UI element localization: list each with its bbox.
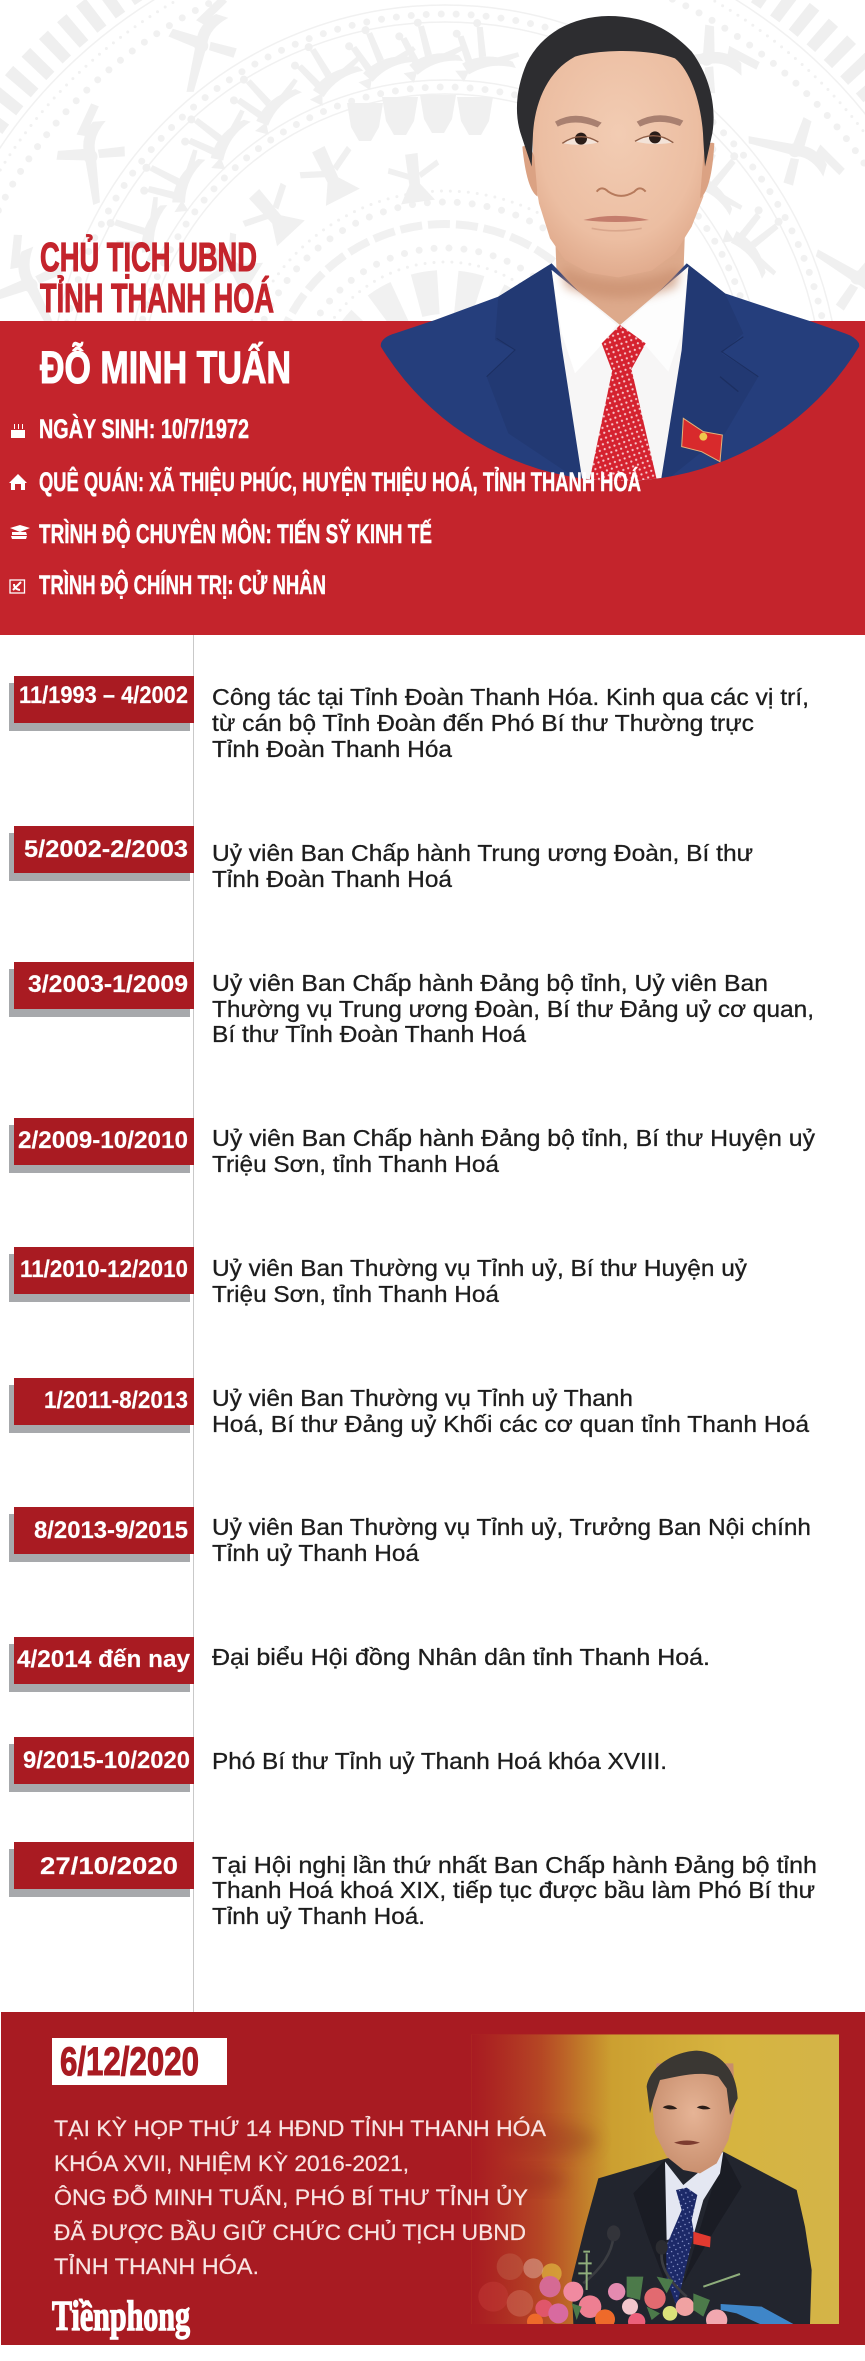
icon: house <box>9 474 27 490</box>
heading: position title: TỈNH THANH HOÁ <box>40 275 274 321</box>
icon: hammer and sickle <box>10 580 24 593</box>
entry: 5/2002-2/2003: Uỷ viên Ban Chấp hành Trung ương Đoàn, Bí thư <box>212 840 753 866</box>
entry: 4/2014 đến nay: Đại biểu Hội đồng Nhân dân tỉnh Thanh Hoá. <box>212 1644 710 1670</box>
entry: 3/2003-1/2009: Thường vụ Trung ương Đoàn, Bí thư Đảng uỷ cơ quan, <box>212 996 814 1022</box>
entry: 11/1993 – 4/2002: từ cán bộ Tỉnh Đoàn đến Phó Bí thư Thường trực <box>212 710 754 736</box>
entry: 3/2003-1/2009 <box>9 962 814 1047</box>
tie <box>666 2188 697 2307</box>
badge <box>693 2232 711 2247</box>
chin shadow <box>562 267 680 298</box>
nose <box>597 188 646 196</box>
entry: 3/2003-1/2009: 3/2003-1/2009 <box>28 971 188 998</box>
entry: 11/2010-12/2010: Triệu Sơn, tỉnh Thanh Hoá <box>212 1281 499 1307</box>
shirt <box>552 267 688 487</box>
eyes <box>563 137 598 145</box>
entry: 8/2013-9/2015: 8/2013-9/2015 <box>34 1517 188 1544</box>
head <box>532 47 705 277</box>
panel: red profile band <box>0 321 865 635</box>
entry: 11/2010-12/2010: Uỷ viên Ban Thường vụ Tỉnh uỷ, Bí thư Huyện uỷ <box>212 1255 748 1281</box>
election text: ÔNG ĐỖ MINH TUẤN, PHÓ BÍ THƯ TỈNH ỦY <box>54 2184 528 2210</box>
eyes <box>663 2105 711 2109</box>
entry: 2/2009-10/2010: 2/2009-10/2010 <box>18 1127 188 1154</box>
info row: date of birth: NGÀY SINH: 10/7/1972 <box>39 414 249 444</box>
heading: full name: ĐỖ MINH TUẤN <box>40 342 291 393</box>
entry: 11/2010-12/2010 <box>9 1247 748 1307</box>
election text: KHÓA XVII, NHIỆM KỲ 2016-2021, <box>54 2151 409 2176</box>
election text: TẠI KỲ HỌP THỨ 14 HĐND TỈNH THANH HÓA <box>54 2116 546 2141</box>
ribbon <box>721 2304 793 2324</box>
icon: graduation cap and books <box>10 525 30 539</box>
election text <box>54 2116 546 2279</box>
entry: 8/2013-9/2015: Tỉnh uỷ Thanh Hoá <box>212 1540 419 1566</box>
flowers <box>478 2252 740 2331</box>
ears <box>522 146 538 197</box>
entry: 9/2015-10/2020 <box>9 1737 667 1792</box>
entry: 2/2009-10/2010: Uỷ viên Ban Chấp hành Đảng bộ tỉnh, Bí thư Huyện uỷ <box>212 1125 816 1151</box>
photo: speaker at podium <box>472 2034 839 2331</box>
info row: education <box>10 519 432 549</box>
entry: 8/2013-9/2015 <box>9 1507 811 1566</box>
entry: 5/2002-2/2003 <box>9 826 753 892</box>
entry: 27/10/2020: Tỉnh uỷ Thanh Hoá. <box>212 1903 425 1929</box>
suit jacket <box>380 263 860 481</box>
drum pattern background <box>0 0 865 321</box>
heading: position title: CHỦ TỊCH UBND <box>40 234 257 280</box>
entry: 1/2011-8/2013 <box>9 1378 809 1437</box>
suit <box>572 2152 812 2324</box>
shirt <box>665 2152 723 2240</box>
date label: 6/12/2020 <box>60 2040 199 2084</box>
entry: 5/2002-2/2003: Tỉnh Đoàn Thanh Hoá <box>212 866 452 892</box>
entry: 9/2015-10/2020: 9/2015-10/2020 <box>23 1747 190 1774</box>
portrait photo illustration <box>362 16 865 500</box>
tie <box>602 325 646 370</box>
party badge <box>682 418 722 462</box>
entry: 11/1993 – 4/2002: Tỉnh Đoàn Thanh Hóa <box>212 736 452 762</box>
entry: 1/2011-8/2013: 1/2011-8/2013 <box>44 1387 188 1414</box>
info row: education: TRÌNH ĐỘ CHUYÊN MÔN: TIẾN SỸ KINH TẾ <box>39 519 432 549</box>
entry: 27/10/2020: 27/10/2020 <box>40 1853 178 1880</box>
entry: 3/2003-1/2009: Bí thư Tỉnh Đoàn Thanh Hoá <box>212 1021 526 1047</box>
entry: 4/2014 đến nay: 4/2014 đến nay <box>17 1646 190 1673</box>
microphones <box>583 2237 687 2297</box>
entry: 9/2015-10/2020: Phó Bí thư Tỉnh uỷ Thanh Hoá khóa XVIII. <box>212 1748 667 1774</box>
entry: 27/10/2020 <box>9 1842 817 1929</box>
entry: 11/1993 – 4/2002 <box>9 676 809 762</box>
entry: 27/10/2020: Thanh Hoá khoá XIX, tiếp tục được bầu làm Phó Bí thư <box>212 1877 815 1903</box>
timeline vertical line <box>193 635 194 2012</box>
entry: 3/2003-1/2009: Uỷ viên Ban Chấp hành Đảng bộ tỉnh, Uỷ viên Ban <box>212 970 768 996</box>
entry: 2/2009-10/2010: Triệu Sơn, tỉnh Thanh Hoá <box>212 1151 499 1177</box>
mouth <box>674 2140 700 2145</box>
entry: 2/2009-10/2010 <box>9 1118 816 1177</box>
election text: ĐÃ ĐƯỢC BẦU GIỮ CHỨC CHỦ TỊCH UBND <box>54 2220 526 2245</box>
entry: 27/10/2020: Tại Hội nghị lần thứ nhất Ban Chấp hành Đảng bộ tỉnh <box>212 1852 817 1878</box>
info row: political level: TRÌNH ĐỘ CHÍNH TRỊ: CỬ NHÂN <box>39 570 326 600</box>
head <box>652 2063 735 2173</box>
info row: political level <box>10 570 326 600</box>
entry: 8/2013-9/2015: Uỷ viên Ban Thường vụ Tỉnh uỷ, Trưởng Ban Nội chính <box>212 1514 811 1540</box>
entry: 11/1993 – 4/2002: Công tác tại Tỉnh Đoàn Thanh Hóa. Kinh qua các vị trí, <box>212 684 809 710</box>
icon: cake <box>11 424 25 438</box>
brows <box>555 116 602 127</box>
info row: date of birth <box>11 414 249 444</box>
entry: 4/2014 đến nay <box>9 1637 710 1692</box>
timeline <box>9 676 817 1929</box>
election text: TỈNH THANH HÓA. <box>54 2254 259 2279</box>
heading: position title <box>40 234 274 321</box>
entry: 11/1993 – 4/2002: 11/1993 – 4/2002 <box>19 682 188 709</box>
hair <box>647 2051 738 2115</box>
entry: 11/2010-12/2010: 11/2010-12/2010 <box>20 1256 188 1283</box>
logo: Tiền Phong: Tiềnphong <box>52 2294 190 2340</box>
hair <box>517 16 714 167</box>
neck <box>552 230 688 330</box>
entry: 5/2002-2/2003: 5/2002-2/2003 <box>24 836 188 863</box>
mouth <box>583 216 649 222</box>
panel: 6/12/2020 election <box>1 2012 865 2345</box>
entry: 1/2011-8/2013: Uỷ viên Ban Thường vụ Tỉnh uỷ Thanh <box>212 1385 633 1411</box>
entry: 1/2011-8/2013: Hoá, Bí thư Đảng uỷ Khối các cơ quan tỉnh Thanh Hoá <box>212 1411 809 1437</box>
